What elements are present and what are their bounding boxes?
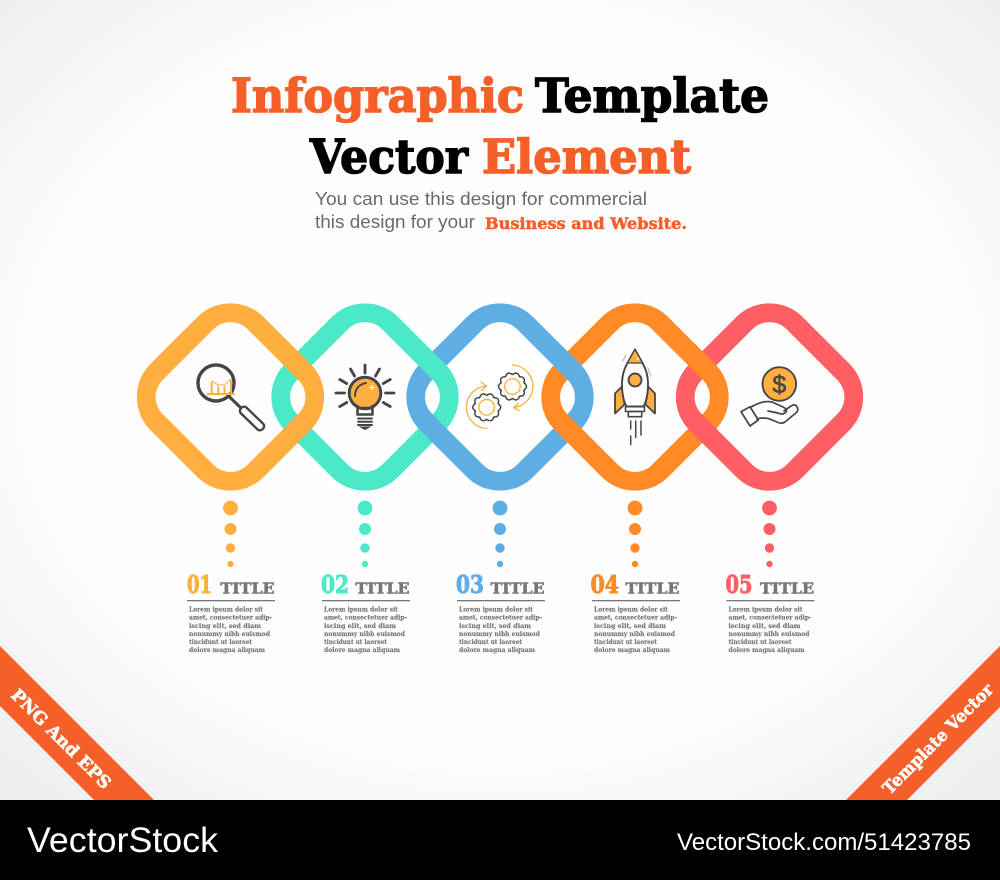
text 1: nonummy nibh euismod	[189, 631, 271, 638]
text 4: Lorem ipsum dolor sit	[594, 606, 668, 614]
ribbon: PNG And EPS: PNG And EPS	[6, 685, 115, 794]
text 5: Lorem ipsum dolor sit	[728, 606, 803, 614]
text 4	[594, 606, 677, 654]
title 2: TITLE	[356, 580, 410, 598]
text 4: tincidunt ut laoreet	[594, 639, 657, 646]
ring 1: amber	[117, 284, 344, 510]
text 2: dolore magna aliquam	[324, 647, 400, 654]
text 1: Lorem ipsum dolor sit	[189, 606, 263, 614]
title: Template	[535, 69, 769, 124]
text 1: tincidunt ut laoreet	[189, 639, 252, 646]
subtitle: You can use this design for commercial	[315, 188, 647, 209]
step 1: dots, number, title, text	[187, 501, 275, 654]
interlocked rounded diamond rings	[136, 303, 864, 491]
text 2: tincidunt ut laoreet	[324, 639, 387, 646]
ring 2: teal	[252, 284, 478, 510]
text 4: amet, consectetuer adip-	[594, 615, 677, 622]
text 1: iscing elit, sed diam	[189, 623, 261, 630]
ribbon: Template Vector: Template Vector	[879, 679, 999, 799]
icon: light bulb	[336, 365, 394, 430]
icon: rocket	[615, 350, 655, 444]
title 1: TITLE	[220, 580, 274, 598]
subtitle: this design for your	[315, 211, 475, 232]
dots 1	[223, 501, 238, 567]
dots 2	[358, 501, 372, 567]
title: Infographic	[231, 69, 524, 124]
title: Vector	[309, 130, 469, 185]
text 3: dolore magna aliquam	[459, 647, 535, 654]
footer bar	[0, 800, 1000, 880]
ring 3: blue	[387, 284, 613, 510]
number 04: 04	[590, 570, 619, 599]
icon: rotating gears	[466, 365, 533, 428]
step 5: dots, number, title, text	[726, 501, 814, 654]
dots 3	[493, 501, 507, 567]
number 05: 05	[726, 570, 752, 599]
number 02: 02	[321, 570, 349, 599]
text 5	[728, 606, 812, 654]
icon: magnifier with chart	[198, 365, 266, 432]
text 1: dolore magna aliquam	[189, 647, 265, 654]
weave overlap: red over orange	[688, 414, 718, 444]
icon: hand holding dollar coin: $	[772, 371, 786, 399]
subtitle: Business and Website.	[485, 214, 687, 233]
title 3: TITLE	[490, 580, 544, 598]
ribbon: PNG And EPS	[0, 646, 154, 800]
text 2: iscing elit, sed diam	[324, 623, 396, 630]
dots 5	[762, 501, 777, 567]
text 2	[324, 606, 407, 654]
title: Element	[482, 130, 691, 185]
footer logo: VectorStock	[27, 821, 219, 860]
text 2: nonummy nibh euismod	[324, 631, 406, 638]
text 4: dolore magna aliquam	[594, 647, 670, 654]
text 3: tincidunt ut laoreet	[459, 639, 522, 646]
text 3: nonummy nibh euismod	[459, 631, 541, 638]
text 5: amet, consectetuer adip-	[728, 615, 812, 622]
text 5: tincidunt ut laoreet	[728, 639, 792, 646]
title	[231, 69, 769, 185]
text 5: iscing elit, sed diam	[728, 623, 801, 630]
ring 5: red	[656, 284, 883, 510]
title 5: TITLE	[760, 580, 814, 598]
weave overlap: blue over teal	[418, 414, 448, 444]
ring 4: orange	[522, 284, 748, 510]
number 01: 01	[187, 570, 212, 599]
text 3: iscing elit, sed diam	[459, 623, 531, 630]
text 3: amet, consectetuer adip-	[459, 615, 542, 622]
title 4: TITLE	[626, 580, 680, 598]
text 4: nonummy nibh euismod	[594, 631, 676, 638]
footer image id: VectorStock.com/51423785	[677, 829, 971, 856]
text 5: dolore magna aliquam	[728, 647, 805, 654]
step 4: dots, number, title, text	[590, 501, 680, 654]
number 03: 03	[456, 570, 484, 599]
text 3	[459, 606, 542, 654]
text 2: amet, consectetuer adip-	[324, 615, 407, 622]
text 2: Lorem ipsum dolor sit	[324, 606, 398, 614]
text 4: iscing elit, sed diam	[594, 623, 666, 630]
step 3: dots, number, title, text	[456, 501, 545, 654]
text 3: Lorem ipsum dolor sit	[459, 606, 533, 614]
text 1	[189, 606, 272, 654]
weave overlap: orange over blue	[552, 414, 582, 444]
icon: hand holding dollar coin	[741, 367, 798, 426]
text 1: amet, consectetuer adip-	[189, 615, 272, 622]
subtitle	[315, 188, 687, 233]
dots 4	[628, 501, 642, 567]
ribbon: Template Vector	[846, 646, 1000, 800]
text 5: nonummy nibh euismod	[728, 631, 810, 638]
step 2: dots, number, title, text	[321, 501, 410, 654]
